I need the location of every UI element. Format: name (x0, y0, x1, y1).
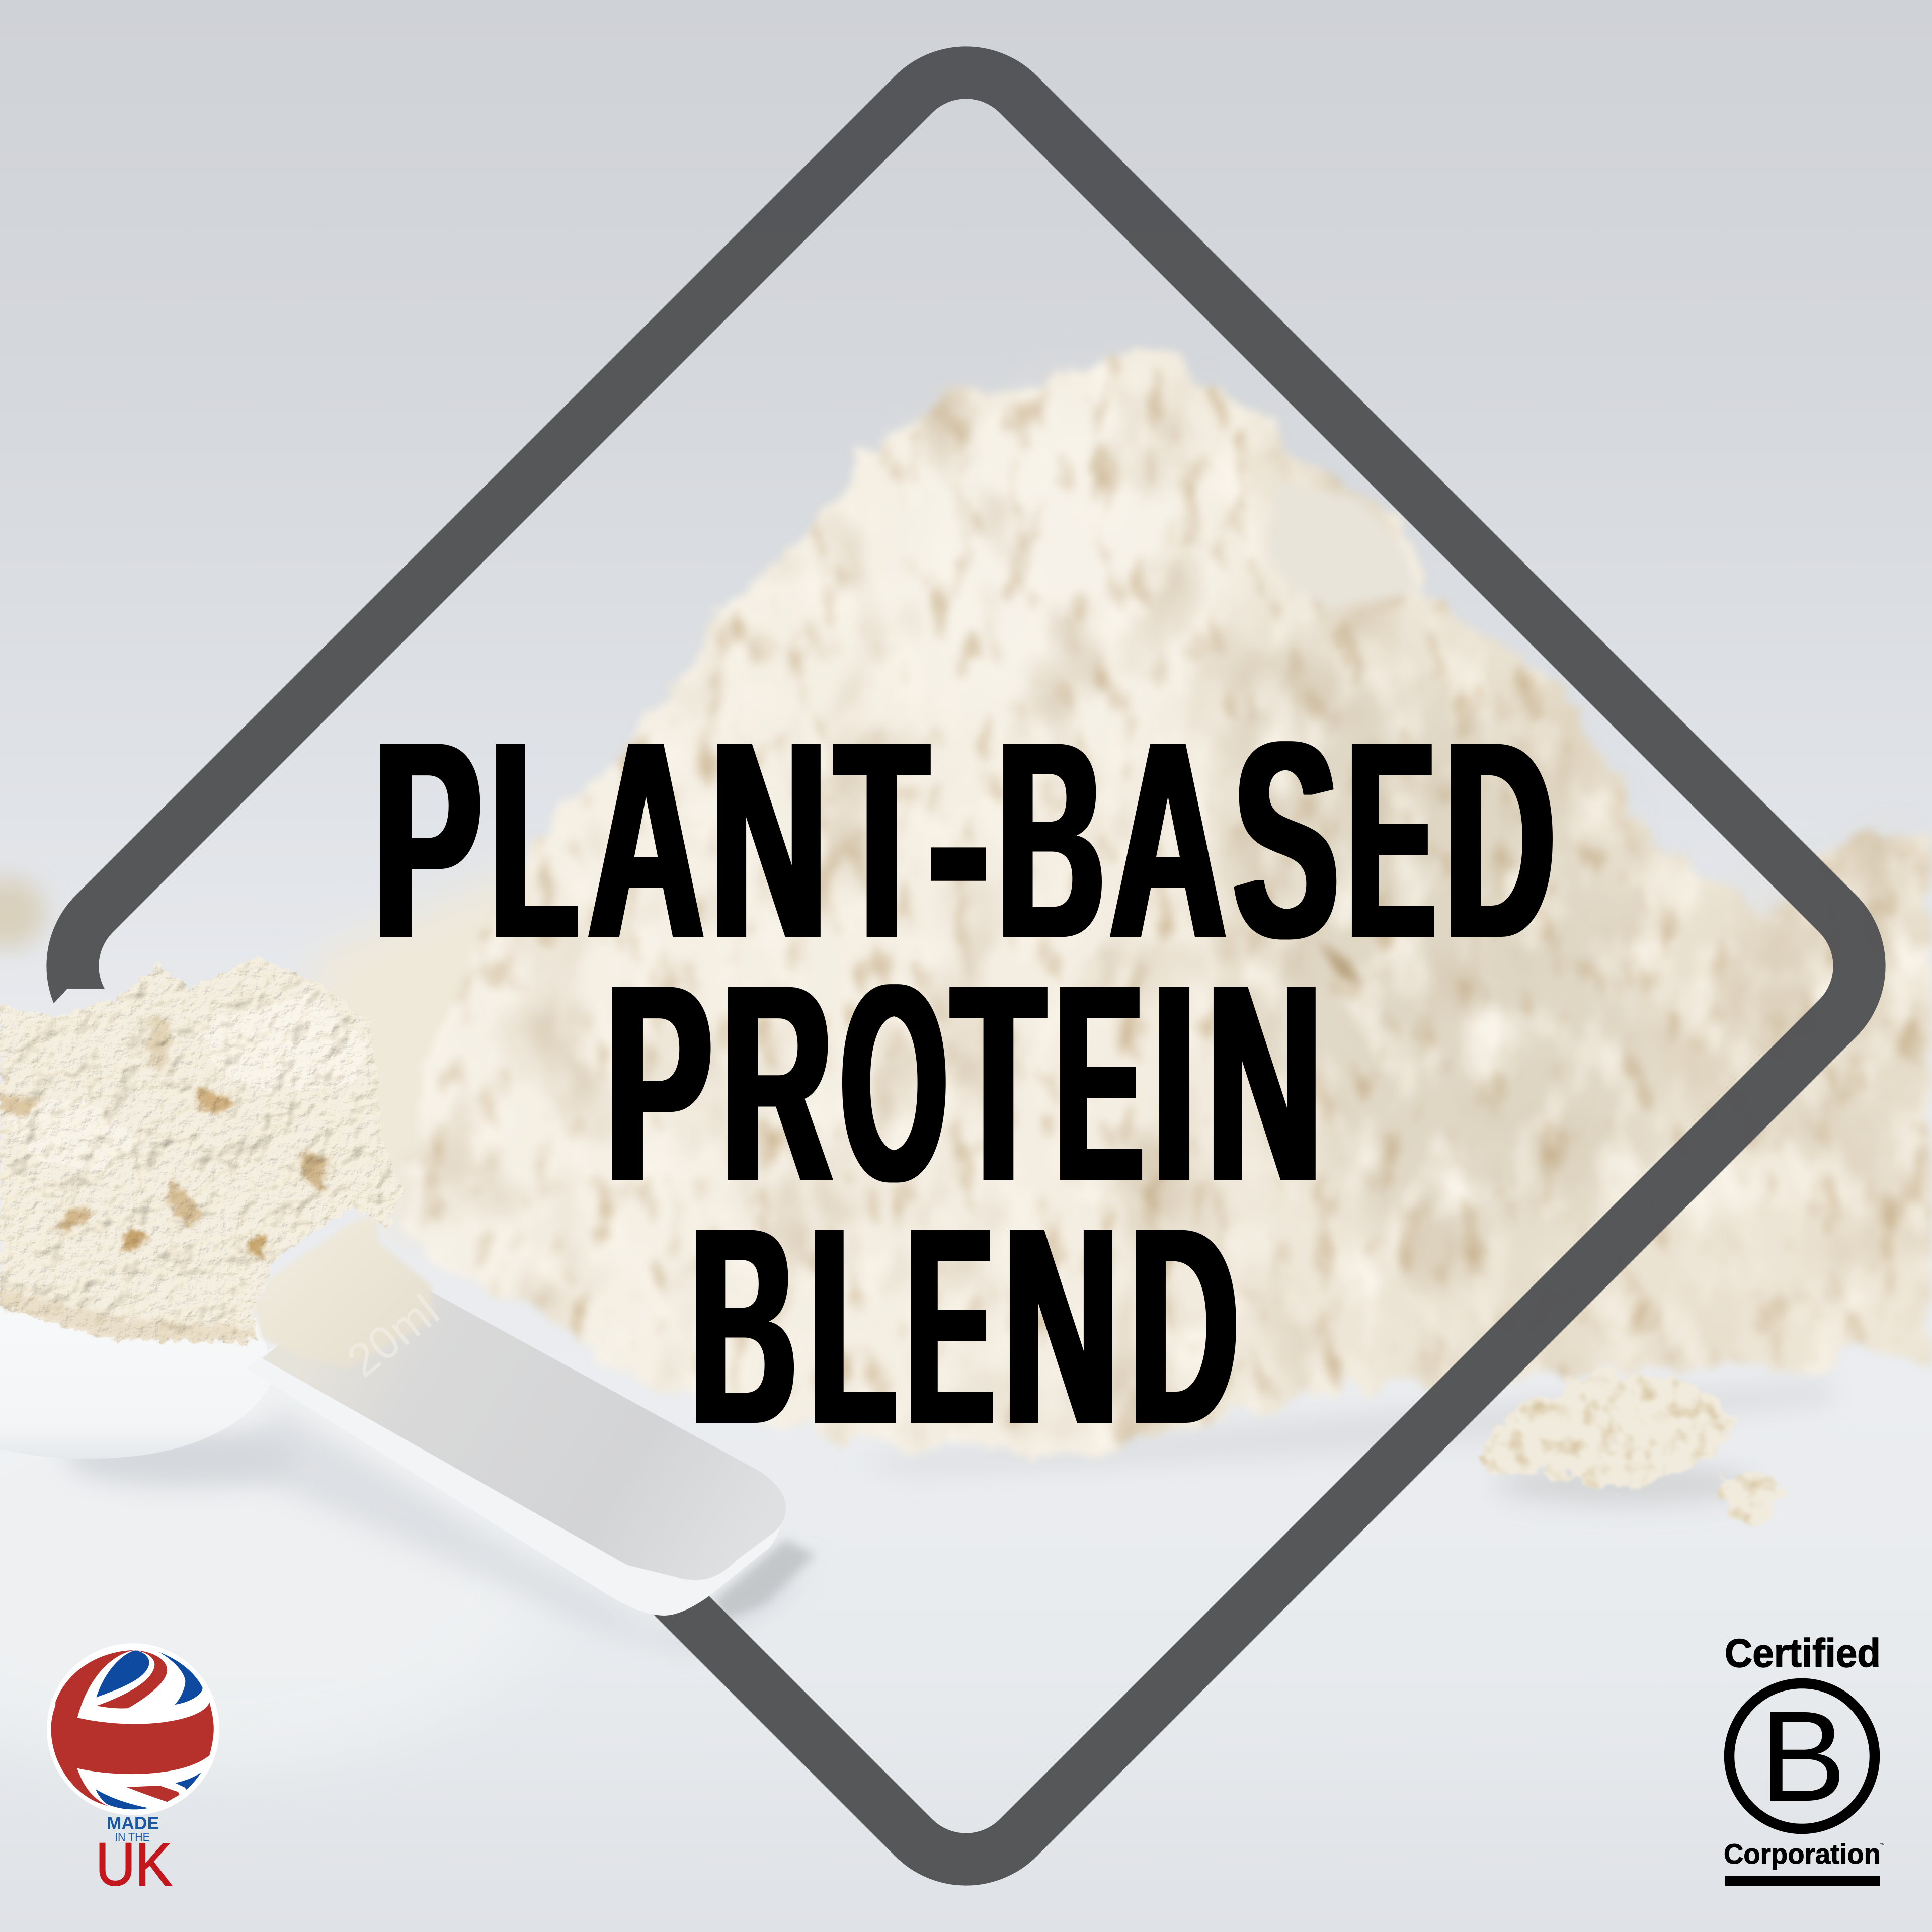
title line: PLANT-BASED: S (1234, 684, 1338, 997)
logo: Made in the UK (47, 1643, 219, 1898)
powder coated scoop wall (254, 1214, 431, 1368)
title line: BLEND: E (906, 1170, 994, 1483)
title line: BLEND: N (1003, 1170, 1119, 1483)
title line: PROTEIN: E (1056, 927, 1143, 1240)
soft out-of-focus left edge of pile (312, 865, 654, 1244)
title line: PROTEIN: I (1153, 927, 1195, 1240)
icon: B circle (1729, 1683, 1875, 1829)
logo: Certified B Corporation (1724, 1631, 1885, 1886)
soft light on table, lower left (0, 1348, 553, 1771)
title line: PROTEIN: P (605, 927, 712, 1240)
underline bar (1725, 1876, 1880, 1886)
photo: white measuring scoop (0, 1214, 786, 1616)
icon: union flag globe (47, 1643, 219, 1815)
title line: PLANT-BASED: L (491, 684, 578, 997)
title line: PROTEIN: R (722, 927, 832, 1240)
title line: PLANT-BASED: E (1347, 684, 1435, 997)
title (373, 684, 1555, 1483)
title line: PLANT-BASED: A (588, 684, 704, 997)
engraved scoop label: 20ml (338, 1285, 448, 1387)
title line: PROTEIN: T (952, 927, 1045, 1240)
shadow under scoop handle (211, 1409, 815, 1655)
title line: BLEND: B (690, 1170, 796, 1483)
text: IN THE: IN THE (115, 1830, 150, 1843)
photo: powder heaped in scoop (0, 958, 404, 1342)
title line: PLANT-BASED: - (928, 684, 989, 997)
small powder crumbs on table (1485, 1374, 1781, 1528)
crease in pile (1318, 941, 1363, 986)
title line: PROTEIN: N (1207, 927, 1322, 1240)
title line: PLANT-BASED: D (1445, 684, 1555, 997)
text: MADE: MADE (107, 1813, 159, 1833)
shadow under scoop bowl (65, 1431, 297, 1487)
scoop bowl (0, 1303, 276, 1459)
title line: BLEND: L (810, 1170, 897, 1483)
title line: PROTEIN: O (841, 927, 947, 1240)
text: Corporation: Corporation (1724, 1838, 1881, 1870)
title line: PLANT-BASED: B (997, 684, 1104, 997)
trademark: ™ (1880, 1843, 1885, 1848)
title line: PLANT-BASED: N (710, 684, 827, 997)
title line: PLANT-BASED: A (1110, 684, 1226, 997)
shadow beneath powder pile (855, 1379, 1831, 1474)
title line: PLANT-BASED: T (835, 684, 928, 997)
shadow at handle tip (714, 1540, 815, 1620)
scoop handle top face (262, 1289, 786, 1580)
blurred powder blob far left (0, 878, 45, 948)
title line: BLEND: D (1130, 1170, 1239, 1483)
text: UK: UK (96, 1830, 172, 1898)
letter B: B (1760, 1684, 1846, 1828)
smooth powder lump near pile peak (1268, 483, 1419, 609)
title line: PLANT-BASED: P (373, 684, 482, 997)
scoop handle lip (246, 1289, 782, 1616)
shadow under crumbs (1494, 1464, 1756, 1504)
text: Certified: Certified (1725, 1631, 1881, 1675)
photo: blurred powder pile (407, 351, 1932, 1460)
